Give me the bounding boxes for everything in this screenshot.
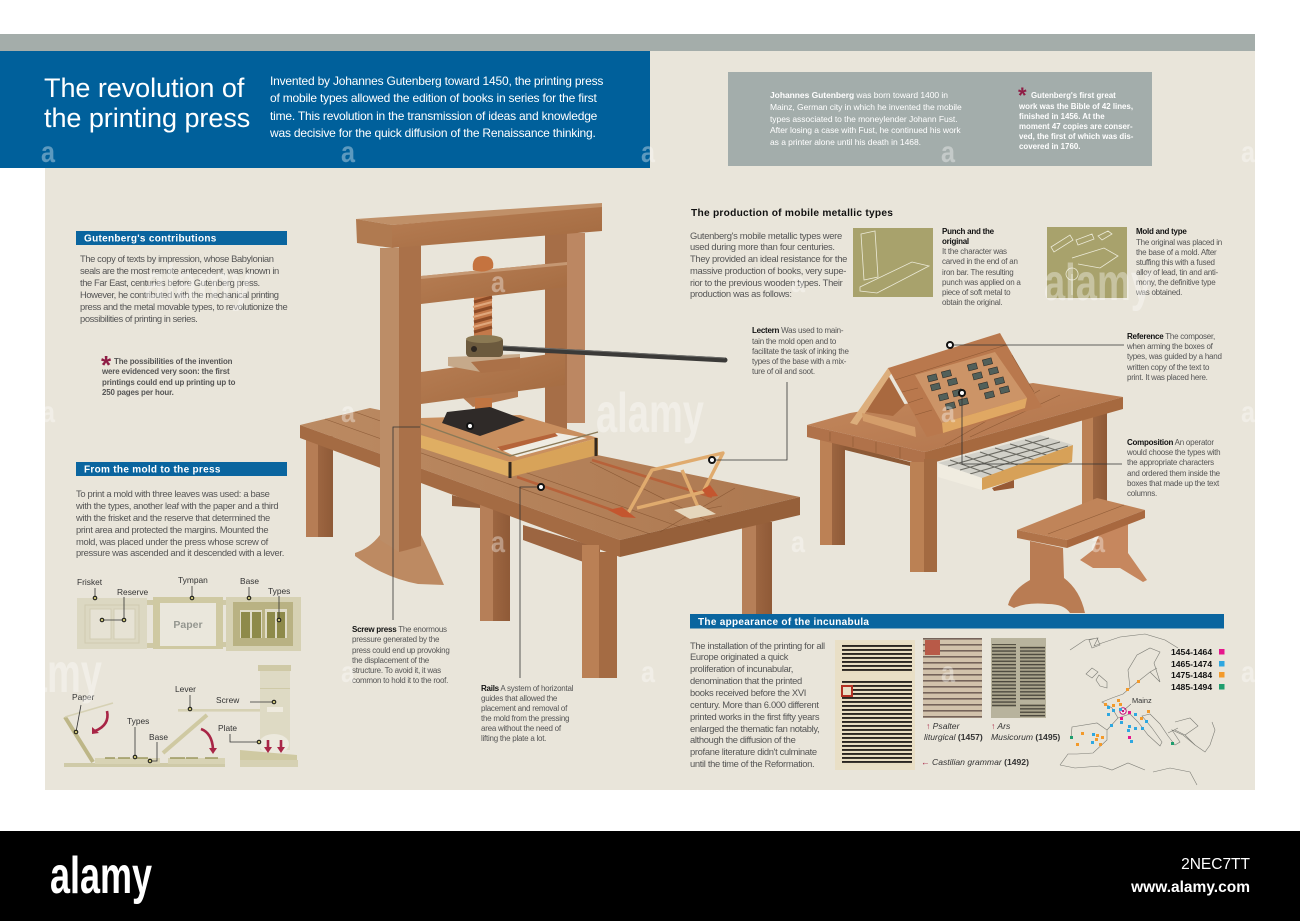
watermark group: alamy	[1044, 254, 1152, 312]
production text: They provided an ideal resistance for the	[690, 253, 847, 264]
sequence labels and pointers: Paper	[72, 692, 95, 702]
mold labels and pointers: Tympan	[178, 575, 208, 585]
incunabula text: until the time of the Reformation.	[690, 758, 814, 769]
panel: Gutenberg's contributions	[76, 231, 287, 324]
sequence labels and pointers: Lever	[175, 684, 196, 694]
sequence labels and pointers: Screw	[216, 695, 240, 705]
watermark group: a	[41, 396, 55, 429]
text: lectern: ture of oil and soot.	[752, 367, 815, 376]
production text: production was as follows:	[690, 288, 792, 299]
image id and URL: 2NEC7TT	[1181, 856, 1251, 873]
text: mold and type: alloy of lead, tin and anti-	[1136, 268, 1219, 277]
watermark group: a	[1241, 136, 1255, 169]
illustration: printing press	[300, 203, 800, 678]
text: punch and the original: punch was applied on a	[942, 278, 1021, 287]
panel: appearance of the incunabula: The appearance of the incunabula	[698, 617, 869, 628]
text: composition: An operator	[1173, 438, 1214, 447]
intro text: of mobile types allowed the edition of books in series for the first	[270, 91, 597, 105]
watermark group: alamy	[596, 381, 704, 444]
watermark group: a	[941, 656, 955, 689]
star note: finished in 1456. At the	[1019, 112, 1105, 121]
page background panel	[45, 51, 1255, 790]
captions: ↑ Psalter	[926, 721, 961, 731]
contributions text: seals are the most remote antecedent, was known in	[80, 265, 279, 276]
map legend: 1485-1494	[1171, 682, 1212, 692]
text: screw press: the displacement of the	[352, 656, 430, 665]
star note: covered in 1760.	[1019, 142, 1080, 151]
book page: Castilian grammar	[835, 640, 915, 770]
text: rails: A system of horizontal	[499, 684, 574, 693]
callout: possibilities	[101, 350, 236, 397]
printing city dots	[1070, 680, 1174, 746]
contributions text: possibilities of printing in series.	[80, 313, 197, 324]
watermark group: a	[941, 136, 955, 169]
text: screw press: pressure generated by the	[352, 635, 440, 644]
biography text: types associated to the moneylender Johann Fust.	[770, 114, 958, 124]
text: mold and type: was obtained.	[1135, 288, 1182, 297]
captions	[921, 721, 1060, 767]
diagram: printing sequence	[64, 665, 298, 767]
composition case	[938, 435, 1073, 491]
map legend: 1475-1484	[1171, 670, 1212, 680]
text: punch and the original: original	[942, 237, 969, 246]
front legs	[582, 545, 617, 678]
platen block and collar	[448, 335, 520, 373]
text: reference: when arming the boxes of	[1126, 342, 1214, 351]
text: rails: guides that allowed the	[481, 694, 558, 703]
text: reference: types, was guided by a hand	[1127, 352, 1222, 361]
biography text: as a printer alone until his death in 1468.	[770, 137, 921, 147]
panel: appearance of the incunabula	[690, 614, 1224, 785]
mold text: with the types, another leaf with the paper and a third	[75, 500, 278, 511]
map legend	[1171, 647, 1224, 692]
text: composition: columns.	[1127, 489, 1157, 498]
top beam	[356, 203, 602, 248]
text: rails: placement and removal of	[481, 704, 568, 713]
text: lectern: facilitate the task of inking the	[752, 347, 850, 356]
panel: from the mold to the press	[75, 462, 287, 558]
mold text: pressure was ascended and it descended with a lever.	[76, 547, 284, 558]
watermark group	[0, 136, 1255, 704]
text: reference: Reference	[1127, 332, 1164, 341]
header panel	[0, 51, 650, 168]
production text: Gutenberg's mobile metallic types were	[690, 230, 842, 241]
text: screw press: common to hold it to the roof.	[352, 676, 448, 685]
screw	[463, 290, 518, 414]
biography text: was born toward 1400 in	[854, 90, 948, 100]
sequence labels and pointers: Types	[127, 716, 149, 726]
watermark group: alamy	[144, 254, 252, 312]
mold labels and pointers: Reserve	[117, 587, 149, 597]
mold labels and pointers	[77, 575, 290, 622]
lectern	[608, 453, 723, 519]
incunabula text: proliferation of incunabular,	[690, 663, 793, 674]
text: mold and type: the base of a mold. After	[1136, 248, 1217, 257]
title: the printing press	[44, 103, 250, 133]
callout: possibilities: The possibilities of the invention	[114, 357, 233, 366]
panel: from the mold to the press: From the mold to the press	[84, 464, 221, 476]
mold labels and pointers: Types	[268, 586, 290, 596]
lectern board	[888, 333, 1042, 437]
production heading: The production of mobile metallic types	[691, 208, 893, 219]
callout: possibilities: 250 pages per hour.	[102, 388, 174, 397]
watermark group: a	[491, 266, 505, 299]
callout: possibilities: *	[101, 350, 112, 380]
text: reference: written copy of the text to	[1126, 363, 1210, 372]
text: mold and type: The original was placed in	[1136, 238, 1222, 247]
table pointers	[947, 342, 1124, 464]
star note: Gutenberg's first great	[1031, 91, 1116, 100]
text: lectern: Was used to main-	[779, 326, 844, 335]
text: lectern: Lectern	[752, 326, 780, 335]
watermark group: a	[641, 136, 655, 169]
sequence labels and pointers: Base	[149, 732, 168, 742]
press pointers	[393, 382, 787, 678]
production text: rior to the previous wooden types. Their	[690, 277, 843, 288]
text: mold and type: Mold and type	[1136, 227, 1187, 236]
captions: Musicorum (1495)	[991, 732, 1060, 742]
text: composition: and ordered them inside the	[1127, 469, 1221, 478]
watermark group: a	[1241, 656, 1255, 689]
front leg	[910, 459, 937, 572]
text: rails: Rails	[481, 684, 500, 693]
watermark group: a	[341, 656, 355, 689]
mold text: with the frisket and the reserve that determined the	[75, 512, 270, 523]
watermark group: a	[41, 136, 55, 169]
incunabula text: century. More than 6.000 different	[690, 699, 819, 710]
title: The revolution of	[44, 73, 245, 103]
biography panel	[728, 72, 1152, 166]
mold labels and pointers: Frisket	[77, 577, 103, 587]
mold text: print area and protected the margins. Mounted the	[76, 524, 268, 535]
diagram: mold leaves	[77, 575, 301, 651]
text: punch and the original: It the character was	[942, 247, 1007, 256]
captions: ← Castilian grammar (1492)	[921, 757, 1029, 767]
watermark group: a	[491, 526, 505, 559]
icon: mold	[1047, 227, 1127, 298]
intro text: was decisive for the quick diffusion of the Renaissance thinking.	[269, 126, 596, 140]
text: punch and the original: obtain the original.	[942, 298, 1002, 307]
star note: moment 47 copies are conser-	[1019, 122, 1133, 131]
text: punch and the original: Punch and the	[942, 227, 995, 236]
screw head	[473, 256, 493, 272]
watermark group: a	[341, 136, 355, 169]
book page: Ars Musicorum	[991, 638, 1046, 718]
frisket leaf	[77, 598, 153, 649]
icon: punch	[853, 228, 933, 297]
text: screw press: The enormous	[396, 625, 447, 634]
base leaf with types	[226, 597, 301, 651]
star note	[1018, 83, 1134, 151]
sequence labels and pointers: Plate	[218, 723, 237, 733]
image id and URL: www.alamy.com	[1130, 879, 1250, 896]
incunabula text: profane literature didn't culminate	[690, 746, 817, 757]
production text: used during more than four centuries.	[690, 241, 835, 252]
map legend: 1454-1464	[1171, 647, 1212, 657]
book page: Psalter	[923, 638, 982, 718]
watermark group: a	[341, 396, 355, 429]
star note: work was the Bible of 42 lines,	[1018, 102, 1133, 111]
captions: ↑ Ars	[991, 721, 1011, 731]
watermark group: a	[941, 396, 955, 429]
callout: possibilities: were evidenced very soon: the first	[101, 367, 230, 376]
footer logo: alamy	[50, 847, 152, 905]
text: punch and the original: carved in the end of an	[942, 257, 1018, 266]
watermark group: a	[1241, 396, 1255, 429]
incunabula text: although the diffusion of the	[690, 734, 796, 745]
star note: *	[1018, 83, 1027, 108]
type tray	[915, 352, 1027, 433]
text: composition: Composition	[1127, 438, 1173, 447]
tympan leaf: Paper	[173, 619, 203, 631]
contributions text: The copy of texts by impression, whose Babylonian	[80, 253, 274, 264]
callout: possibilities: printings could end up printing up to	[102, 378, 236, 387]
incunabula text: denomination that the printed	[690, 675, 802, 686]
Mainz marker: Mainz	[1132, 696, 1152, 705]
mold text: To print a mold with three leaves was used: a base	[76, 488, 270, 499]
step one	[64, 703, 225, 767]
watermark group: a	[791, 266, 805, 299]
sequence labels and pointers	[72, 684, 276, 763]
incunabula text: books received before the XVI	[690, 687, 806, 698]
contributions text: press and the metal movable types, to revolutionize the	[80, 301, 287, 312]
incunabula text: printed works in the first fifty years	[690, 711, 820, 722]
panel: Gutenberg's contributions: Gutenberg's contributions	[84, 234, 217, 244]
map of Europe	[1060, 634, 1224, 785]
text: mold and type: stuffing this with a fused	[1136, 258, 1215, 267]
text: mold and type: mony, the definitive type	[1136, 278, 1216, 287]
step three: press tower	[178, 665, 298, 767]
text: lectern: types of the base with a mix-	[752, 357, 847, 366]
text: rails: lifting the plate a lot.	[481, 734, 546, 743]
intro text: time. This revolution in the transmission of ideas and knowledge	[270, 109, 598, 123]
intro text: Invented by Johannes Gutenberg toward 1450, the printing press	[270, 74, 603, 88]
text: punch and the original: iron bar. The resulting	[942, 268, 1013, 277]
lectern frame	[850, 368, 916, 437]
panel: production of mobile metallic types	[690, 208, 1222, 307]
watermark group: a	[1091, 526, 1105, 559]
map outline	[1060, 634, 1215, 785]
incunabula text: enlarged the thematic fan notably,	[690, 723, 819, 734]
text: screw press: Screw press	[352, 625, 397, 634]
right post	[545, 233, 585, 433]
black plate	[442, 407, 525, 436]
table legs	[820, 408, 1107, 545]
map legend: 1465-1474	[1171, 659, 1212, 669]
biography text: Johannes Gutenberg	[770, 90, 854, 100]
text: rails: area without the need of	[481, 724, 562, 733]
crossbars	[421, 262, 567, 404]
illustration: composing table	[807, 333, 1147, 613]
text: screw press: structure. To avoid it, it was	[352, 666, 441, 675]
text: rails: the mold from the pressing	[481, 714, 569, 723]
top gray band	[0, 34, 1255, 51]
star note: ved, the first of which was dis-	[1019, 132, 1134, 141]
image id and URL	[1130, 856, 1251, 896]
text: screw press: press could end up provoking	[352, 646, 450, 655]
production text: massive production of books, very supe-	[690, 265, 846, 276]
contributions text: However, he contributed with the mechanical printing	[80, 289, 279, 300]
lever	[500, 346, 725, 360]
text: lectern: tain the mold open and to	[752, 337, 837, 346]
mold text: mold, was placed under the press whose screw of	[76, 536, 269, 547]
tympan leaf	[153, 597, 229, 649]
captions: liturgical (1457)	[924, 732, 983, 742]
text: reference: print. It was placed here.	[1127, 373, 1208, 382]
watermark group: a	[641, 656, 655, 689]
back legs	[306, 436, 772, 621]
incunabula text: Europe originated a quick	[690, 651, 789, 662]
table top	[807, 383, 1123, 465]
text: composition: boxes that made up the text	[1127, 479, 1220, 488]
mold frame on press	[421, 415, 598, 478]
table top	[300, 408, 800, 557]
Mainz marker	[1120, 696, 1152, 714]
text: composition: would choose the types with	[1126, 448, 1220, 457]
biography text: Mainz, German city in which he invented the mobile	[770, 102, 962, 112]
biography text: After losing a case with Fust, he continued his work	[770, 125, 961, 135]
text: punch and the original: piece of soft metal to	[942, 288, 1011, 297]
incunabula text: The installation of the printing for all	[690, 640, 825, 651]
text: composition: the appropriate characters	[1127, 458, 1214, 467]
mold labels and pointers: Base	[240, 576, 259, 586]
stool	[1008, 498, 1147, 613]
step two	[163, 715, 225, 764]
left post with foot	[355, 245, 444, 585]
watermark group: a	[791, 526, 805, 559]
text: reference: The composer,	[1163, 332, 1215, 341]
rails	[517, 460, 712, 510]
footer band	[0, 831, 1300, 921]
contributions text: the Far East, centuries before Gutenberg press.	[80, 277, 260, 288]
